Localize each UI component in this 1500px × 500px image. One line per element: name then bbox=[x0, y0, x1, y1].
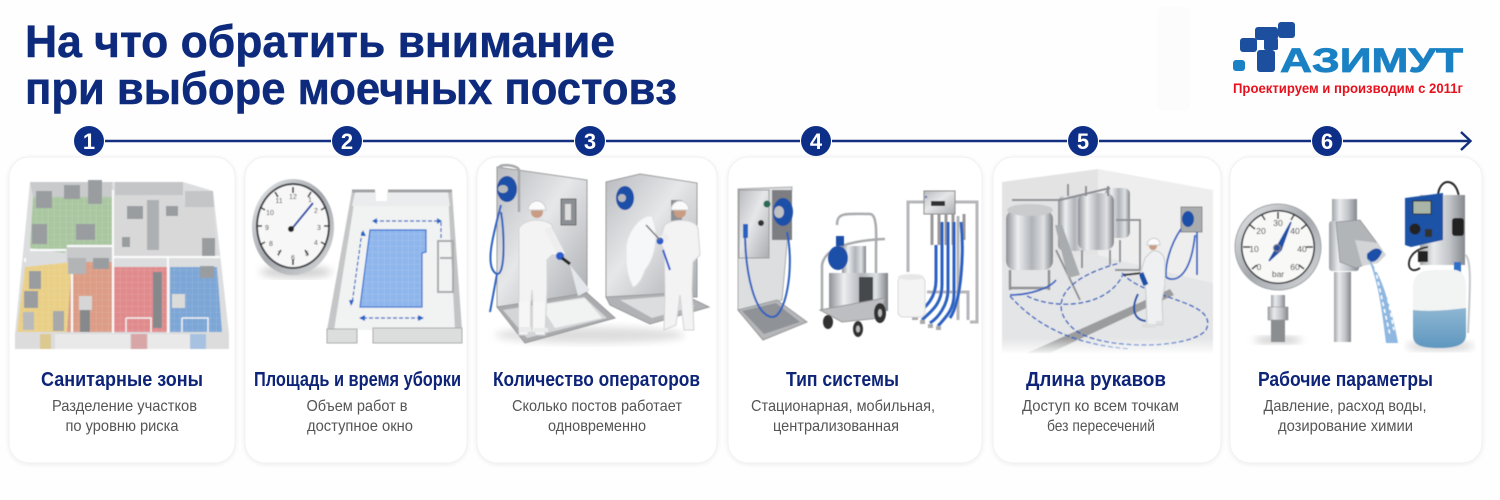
description: доступное окно bbox=[307, 418, 413, 435]
illustration: room with marked area bbox=[327, 188, 462, 343]
icon: dosing pump bbox=[1405, 182, 1474, 350]
step 2: 2 bbox=[341, 129, 353, 154]
step 3: 3 bbox=[584, 129, 596, 154]
step 1: 1 bbox=[83, 129, 95, 154]
icon: wall clock: 12 bbox=[289, 194, 297, 201]
step 5: 5 bbox=[1077, 129, 1089, 154]
icon: wall clock: 1 bbox=[308, 197, 312, 204]
step 4: 4 bbox=[810, 129, 823, 154]
heading: Площадь и время уборки bbox=[254, 369, 461, 391]
panel: number of operators bbox=[477, 157, 717, 463]
step 1 bbox=[74, 126, 104, 156]
icon: wall clock: 4 bbox=[314, 240, 318, 247]
description bbox=[512, 398, 683, 435]
icon: wall clock: 10 bbox=[266, 210, 274, 217]
operator one bbox=[519, 201, 590, 335]
icon: wall clock: 11 bbox=[275, 198, 283, 205]
icon: pressure gauge: 40 bbox=[1290, 226, 1300, 236]
description bbox=[1022, 398, 1179, 435]
illustration: mobile cart bbox=[820, 214, 888, 337]
icon: wall clock: 6 bbox=[291, 255, 295, 262]
icon: pressure gauge bbox=[1235, 204, 1321, 343]
icon: pressure gauge: 20 bbox=[1256, 226, 1266, 236]
illustration: zoned floor plan bbox=[15, 180, 229, 349]
panel: hose length bbox=[993, 157, 1221, 463]
icon: pressure gauge: 30 bbox=[1273, 218, 1283, 228]
heading: Рабочие параметры bbox=[1258, 369, 1433, 391]
icon: pressure gauge: 10 bbox=[1249, 244, 1259, 254]
step 5 bbox=[1068, 126, 1098, 156]
step 6 bbox=[1312, 126, 1342, 156]
logo: Azimut bbox=[1157, 7, 1463, 111]
description: централизованная bbox=[773, 418, 899, 435]
heading: Длина рукавов bbox=[1026, 369, 1166, 391]
description: Стационарная, мобильная, bbox=[751, 398, 935, 415]
panel: area and cleaning time bbox=[245, 157, 467, 463]
description bbox=[751, 398, 935, 435]
icon: pipe with water flow bbox=[1329, 199, 1398, 343]
icon: wall clock: 2 bbox=[314, 208, 318, 215]
icon: wall clock: 5 bbox=[305, 251, 309, 258]
icon: pressure gauge: 0 bbox=[1257, 262, 1262, 272]
description bbox=[306, 398, 413, 435]
description: без пересечений bbox=[1047, 418, 1155, 435]
description: Сколько постов работает bbox=[512, 398, 683, 415]
icon: pressure gauge: 60 bbox=[1290, 262, 1300, 272]
description: по уровню риска bbox=[66, 418, 179, 435]
panel: operating parameters bbox=[1230, 157, 1482, 463]
illustration: workshop with hose reach bbox=[1000, 169, 1215, 355]
step 3 bbox=[575, 126, 605, 156]
title bbox=[25, 16, 677, 114]
illustration: stationary unit bbox=[738, 187, 807, 340]
icon: wall clock: 8 bbox=[269, 241, 273, 248]
icon: wall clock: 9 bbox=[265, 225, 269, 232]
timeline with numbered steps bbox=[74, 126, 1470, 156]
description: Объем работ в bbox=[306, 398, 408, 415]
icon: wall clock bbox=[252, 179, 334, 278]
title: На что обратить внимание bbox=[25, 16, 615, 67]
heading: Тип системы bbox=[786, 369, 899, 391]
title: при выборе моечных постовз bbox=[25, 63, 677, 114]
right station bbox=[606, 174, 709, 324]
step 2 bbox=[332, 126, 362, 156]
description: одновременно bbox=[548, 418, 646, 435]
panel: system type bbox=[728, 157, 982, 463]
illustration: two washing stations with operators bbox=[490, 165, 709, 343]
icon: pressure gauge: 40 bbox=[1297, 244, 1307, 254]
icon: wall clock: 7 bbox=[277, 251, 281, 258]
step 6: 6 bbox=[1321, 129, 1333, 154]
description: Разделение участков bbox=[52, 398, 197, 415]
logo: Azimut: Проектируем и производим с 2011г bbox=[1233, 80, 1463, 96]
description bbox=[52, 398, 197, 435]
step 4 bbox=[801, 126, 831, 156]
icon: pressure gauge: bar bbox=[1272, 269, 1284, 279]
description: Давление, расход воды, bbox=[1264, 398, 1426, 415]
description: Доступ ко всем точкам bbox=[1022, 398, 1179, 415]
heading: Количество операторов bbox=[493, 369, 700, 391]
panel: sanitary zones bbox=[9, 157, 235, 463]
icon: wall clock: 3 bbox=[317, 225, 321, 232]
logo: Azimut: АЗИМУТ bbox=[1280, 42, 1463, 80]
description: дозирование химии bbox=[1278, 418, 1413, 435]
operator two bbox=[646, 201, 700, 330]
description bbox=[1264, 398, 1426, 435]
illustration: centralized manifold bbox=[898, 191, 977, 328]
left station bbox=[490, 165, 615, 343]
operator bbox=[1140, 238, 1165, 326]
heading: Санитарные зоны bbox=[41, 369, 203, 391]
